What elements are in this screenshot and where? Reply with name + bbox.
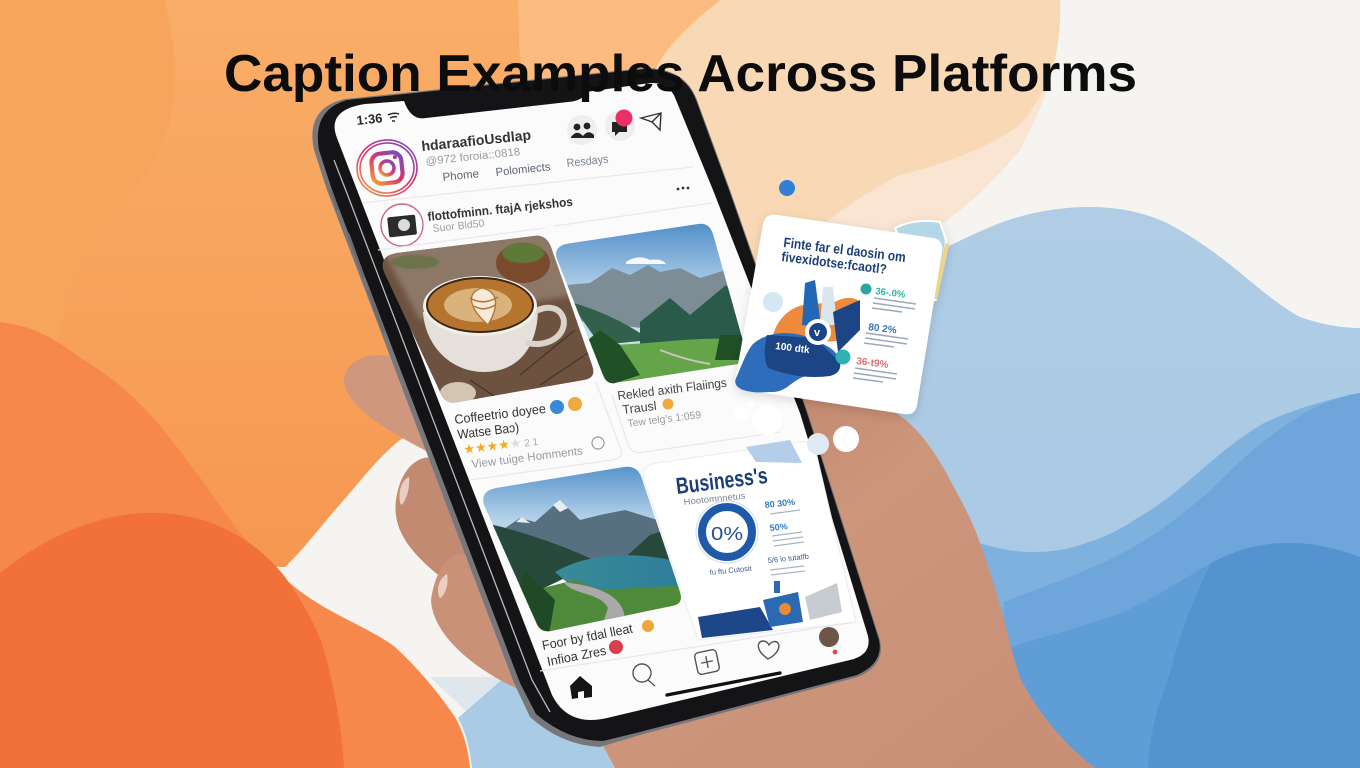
emoji xyxy=(568,397,582,411)
right caption: Rekled axith Flaiings xyxy=(617,376,728,403)
status time: 1:36 xyxy=(356,110,383,128)
profile avatar xyxy=(819,627,839,654)
icon: teal check xyxy=(860,284,872,294)
home indicator xyxy=(667,673,780,695)
icon: search xyxy=(633,664,655,686)
stat one: 80 30% xyxy=(764,497,796,510)
lake caption: Foor by fdal lleat xyxy=(541,621,634,653)
red stat lines xyxy=(853,368,897,382)
illustration: check badge: v xyxy=(814,327,821,339)
floating infographic card xyxy=(735,215,949,414)
hand holding the phone xyxy=(344,355,1095,768)
fingernails xyxy=(399,477,448,598)
palm and thumb xyxy=(600,395,1095,768)
instagram logo xyxy=(354,137,420,199)
title: Caption Examples Across Platforms xyxy=(224,45,1137,103)
illustration: green badge xyxy=(836,350,850,364)
screen xyxy=(335,83,869,720)
stat lines xyxy=(770,510,805,575)
orange mid layer xyxy=(0,322,470,768)
icon: heart xyxy=(758,641,779,659)
frame highlight xyxy=(334,160,550,712)
icon: wifi xyxy=(388,113,399,121)
left comments: View tuige Homments xyxy=(471,445,584,471)
icon: info circle xyxy=(592,437,604,449)
donut chart: 0% xyxy=(711,524,743,544)
yellow edge xyxy=(933,243,949,300)
post author: flottofminn. ftajA rjekshos xyxy=(427,195,574,224)
icon: send xyxy=(641,113,661,130)
card subheading: Hootomnnetus xyxy=(683,491,746,507)
blue stat lines xyxy=(864,333,908,347)
orange dark layer xyxy=(0,513,344,768)
stat two: 50% xyxy=(769,521,788,533)
post cards xyxy=(362,167,856,671)
card outlines xyxy=(362,167,780,480)
right light blue xyxy=(840,207,1360,768)
red stat: 36-t9% xyxy=(856,356,889,371)
emoji xyxy=(609,640,623,654)
illustration: check badge xyxy=(805,319,831,345)
bottom centre blue xyxy=(458,677,625,768)
emoji xyxy=(642,620,654,632)
icon: people button xyxy=(567,115,597,145)
post subtitle: Suor Bld50 xyxy=(432,218,485,235)
card heading line one: Finte far el daosin om xyxy=(783,234,907,265)
main orange xyxy=(0,0,600,567)
business infographic card xyxy=(643,440,856,640)
profile name: hdaraafioUsdlap xyxy=(421,127,532,154)
bottom navigation xyxy=(570,627,839,699)
illustration: bottles xyxy=(802,280,860,352)
more dots xyxy=(677,187,689,190)
illustration: navy panel xyxy=(765,335,840,377)
right caption line two: Trausl xyxy=(622,399,657,417)
phone screen header xyxy=(354,110,689,246)
peach blob xyxy=(640,0,1060,420)
ring finger xyxy=(431,554,530,690)
teal stat lines xyxy=(872,298,916,312)
emoji xyxy=(662,398,674,410)
phone frame silver xyxy=(312,68,881,747)
phone xyxy=(312,68,881,747)
post avatar xyxy=(381,204,423,246)
card heading: Business's xyxy=(674,462,769,499)
light orange band xyxy=(518,0,720,200)
mountain photo xyxy=(556,224,742,384)
card body xyxy=(735,215,942,414)
blue stat two: 80 2% xyxy=(868,322,897,336)
illustration: orange blob xyxy=(773,298,860,345)
bottom centre pale blue xyxy=(430,677,560,715)
lake photo xyxy=(483,466,681,632)
floating bubbles xyxy=(734,400,859,455)
bubble: blue dot xyxy=(779,180,795,196)
donut chart xyxy=(696,501,758,563)
middle finger xyxy=(395,457,490,578)
nav divider xyxy=(540,622,855,671)
tab: resdays: Resdays xyxy=(566,154,609,170)
illustration: blue blob xyxy=(735,333,838,392)
right comments: Tew telg's 1:059 xyxy=(627,409,702,430)
stat three: 5/6 lo tutatfb xyxy=(767,552,809,565)
lake caption line two: Infioa Zres xyxy=(546,643,608,669)
tab: polomiects: Polomiects xyxy=(495,161,551,179)
star rating: ★★★★★ 2 1 xyxy=(463,433,539,457)
tab: phome: Phome xyxy=(442,168,480,184)
pale badge xyxy=(763,292,783,312)
left caption: Coffeetrio doyee xyxy=(454,401,547,427)
coffee photo xyxy=(382,236,594,403)
icon: verified badge xyxy=(550,400,564,414)
card illustration xyxy=(698,581,842,638)
right deep blue xyxy=(1000,543,1360,768)
right mid blue xyxy=(979,393,1360,768)
icon: add post xyxy=(694,649,720,675)
darker orange top left xyxy=(0,0,175,345)
card back accent xyxy=(895,221,946,300)
left caption line two: Watse Baɔ) xyxy=(457,420,520,442)
index finger xyxy=(344,355,450,452)
stat note: fu ftu Cutosit xyxy=(709,564,753,577)
icon: messages with badge xyxy=(605,110,635,141)
side buttons xyxy=(331,190,384,333)
teal stat: 36-.0% xyxy=(875,286,906,301)
icon: home xyxy=(570,676,592,699)
blue stat: 100 dtk xyxy=(775,341,811,356)
profile handle: @972 foroia::0818 xyxy=(425,146,521,168)
card heading line two: fivexidotse:fcaotl? xyxy=(781,249,888,277)
phone body black xyxy=(318,69,880,741)
